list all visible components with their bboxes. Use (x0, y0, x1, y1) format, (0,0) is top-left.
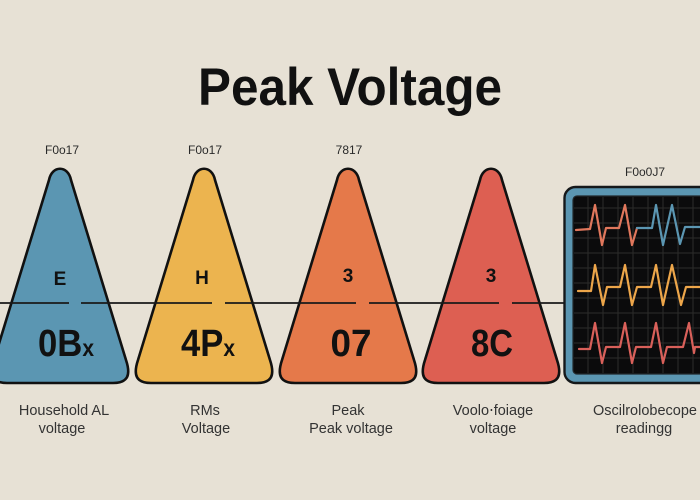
value: 07: 07 (330, 323, 372, 365)
waveform: red (579, 323, 700, 363)
caption: household AC voltage: voltage (39, 421, 85, 437)
caption: peak voltage: Peak (331, 403, 365, 419)
panel: RMS voltage (136, 143, 272, 437)
letter: E: E (54, 269, 66, 290)
label: top 2: F0o17 (188, 143, 222, 157)
value: 4Px: 4Px (181, 323, 235, 365)
triangle: blue (0, 169, 128, 383)
label: top 3: 7817 (336, 143, 363, 157)
digit: 3: 3 (343, 266, 353, 287)
oscilloscope screen (573, 196, 700, 374)
digit: 3: 3 (486, 266, 496, 287)
caption: peak voltage: Peak voltage (309, 421, 393, 437)
triangle: red (423, 169, 559, 383)
triangle: orange (280, 169, 416, 383)
axis line (0, 302, 566, 304)
screen grid (574, 197, 700, 373)
panel: household AC voltage (0, 143, 128, 437)
label: top 1: F0o17 (45, 143, 79, 157)
caption: oscilloscope reading: readingg (616, 421, 672, 437)
oscilloscope body (564, 187, 700, 383)
panel: oscilloscope (564, 165, 700, 437)
caption: RMS voltage: Voltage (182, 421, 230, 437)
waveform: blue (637, 205, 700, 245)
caption: RMS voltage: RMs (190, 403, 220, 419)
caption: voltage: Voolo⋅foiage (453, 403, 533, 419)
value: 0Bx: 0Bx (38, 323, 94, 365)
value: 8C: 8C (471, 323, 513, 365)
caption: oscilloscope reading: Oscilrolobecope (593, 403, 697, 419)
waveform: salmon (576, 205, 637, 245)
waveform: orange (578, 265, 700, 305)
label: top 5: F0o0J7 (625, 165, 665, 179)
caption: voltage: voltage (470, 421, 516, 437)
letter: H: H (195, 268, 209, 289)
title: Peak Voltage (198, 58, 502, 117)
triangle: yellow (136, 169, 272, 383)
panel: peak-to-peak voltage (423, 169, 559, 437)
caption: household AC voltage: Household AL (19, 403, 109, 419)
panel: peak voltage (280, 143, 416, 437)
